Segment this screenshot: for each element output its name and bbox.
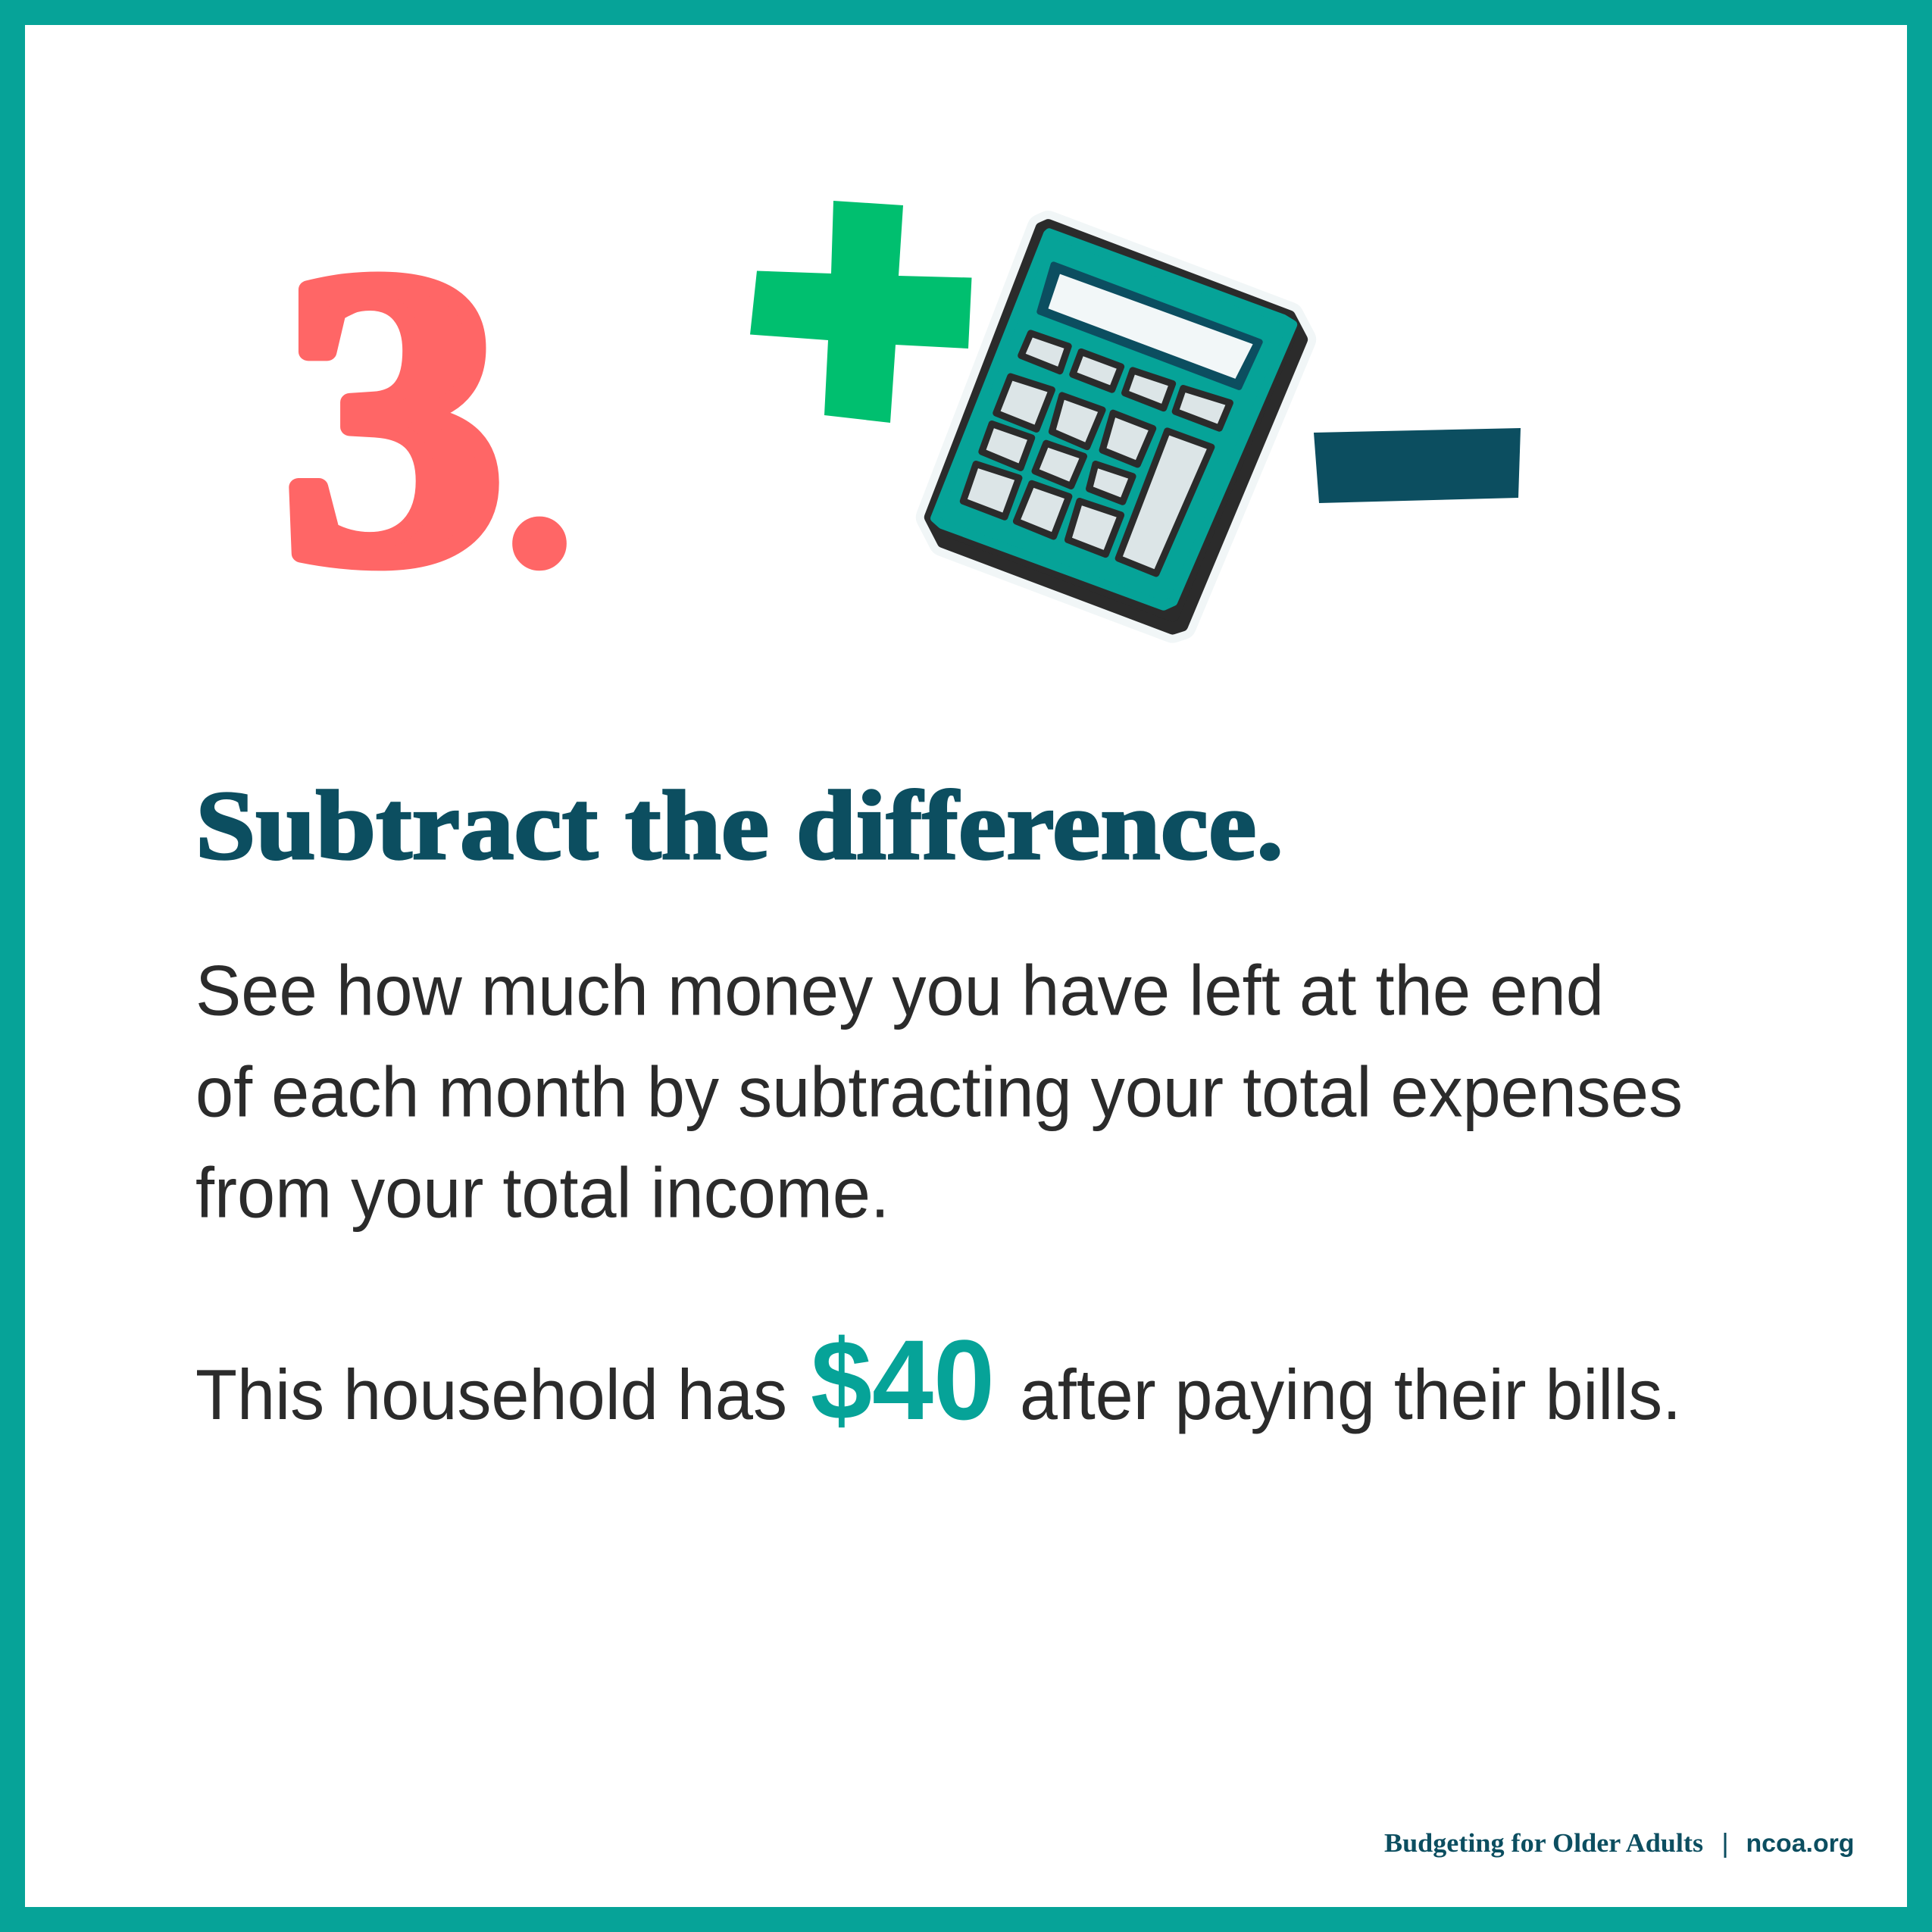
result sentence: after paying their bills. — [1020, 1355, 1681, 1434]
calculator halo — [930, 225, 1302, 629]
body paragraph: of each month by subtracting your total expenses — [195, 1052, 1683, 1132]
body paragraph: See how much money you have left at the end — [195, 950, 1604, 1030]
footer — [1384, 1828, 1855, 1858]
highlighted amount: $40 — [811, 1316, 995, 1443]
result sentence: This household has — [195, 1355, 787, 1434]
icon: calculator — [930, 225, 1302, 629]
step number — [282, 186, 581, 649]
calculator screen — [1039, 264, 1260, 387]
calculator body — [930, 225, 1302, 629]
body paragraph — [195, 950, 1683, 1232]
heading: Subtract the difference. — [195, 771, 1283, 880]
icon: minus sign — [1314, 428, 1521, 503]
step number: . — [498, 267, 581, 639]
footer: ncoa.org — [1746, 1829, 1855, 1857]
icon: plus sign — [750, 201, 971, 423]
step number: 3 — [282, 186, 505, 649]
footer: Budgeting for Older Adults — [1384, 1828, 1703, 1858]
calculator keys — [963, 331, 1233, 574]
result sentence — [195, 1316, 1681, 1443]
calculator face — [935, 233, 1293, 606]
body paragraph: from your total income. — [195, 1153, 889, 1232]
